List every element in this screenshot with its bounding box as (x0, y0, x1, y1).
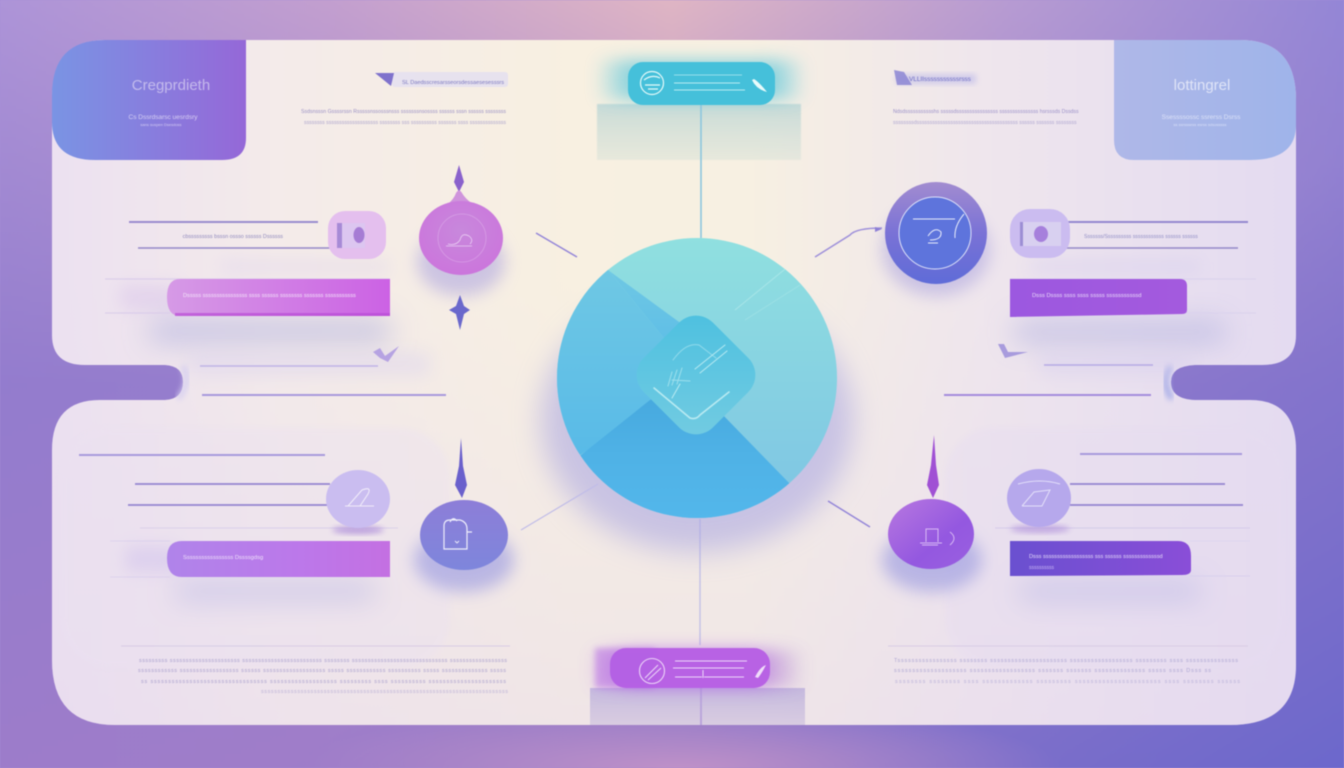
bar: upper left (105, 279, 390, 316)
item: upper right row: Sssssss/Ssssssssss ssssssssssss ssssss ssssss (1084, 234, 1198, 240)
connector: bottom vertical line (700, 519, 701, 725)
item: upper right row (1010, 209, 1248, 276)
central disc shadow (541, 288, 853, 552)
text block: bottom left: ssssssssssss ssssssssssssssssss ssssss sssssssssssssssssss sssss ssssssssssss ssssssssss sssss ssssssssssssss sssss (138, 668, 506, 674)
top center pill (597, 60, 805, 160)
arrow: star below (449, 295, 470, 330)
bar: upper left: Dsssss ssssssssssssssss ssss ssssss ssssssss sssssss sssssssssss (183, 293, 356, 299)
icon: square badge (328, 211, 386, 259)
text block: bottom right (888, 646, 1248, 685)
arrow and rule: mid left (200, 346, 446, 395)
heading tag with icon: SL Daedsscresarsseorsdessaesesesssrs (402, 80, 504, 86)
arrow: tip above (455, 438, 467, 498)
wedge: bottom (580, 400, 790, 518)
card: top left title: sans suspen Dsesdoss (140, 122, 182, 127)
pill text lines (673, 661, 747, 678)
card: top left title (52, 40, 246, 160)
item: lower left row (79, 455, 398, 534)
arrow and rule: mid right (944, 344, 1153, 395)
bar: lower right: ssssssssss (1029, 565, 1054, 571)
arrow: tip above (927, 435, 939, 498)
card: top left title: Cs Dssrdsarsc uesrdsry (129, 114, 198, 121)
text block: bottom left: sssssssssssssssssssssssssssssssssssssssssssssssssssssssssssssssssssssssssss (261, 689, 508, 695)
text block: bottom left: sssssssss ssssssssssssssssssssss sssssssssssssssssssssssss ssssssss ssssssssssssssssssssssssssssss ssssssssssssssssss (139, 658, 507, 664)
text block: top left heading and copy (301, 72, 508, 126)
card: top right title: Ssessssossc ssrerss Dsrss (1162, 114, 1241, 121)
bar: upper right (1010, 279, 1256, 317)
wedge: left (556, 270, 664, 455)
bar: lower right: Dsss ssssssssssssssssss sss ssssss sssssssssssssd (1029, 554, 1163, 560)
text block: top right heading and copy: Ndsdssssssssssshs sssssdssssssssssssssss sssssssssssssss hsrsssds Dssdss (893, 109, 1079, 115)
text block: top left heading and copy: ssssssss ssssssssssssssssssss ssssssss sss ssssssssss sssssss ssss ssssssssssssss (304, 120, 506, 126)
item: upper left row: cbsssssssss bsssn ossso ssssss Dssssss (183, 234, 283, 240)
icon: node bottom right (920, 529, 954, 545)
bottom center pill (588, 648, 806, 725)
central disc (540, 238, 837, 530)
icon: square badge (1010, 209, 1070, 258)
item: upper left row (129, 211, 390, 276)
card: top right title: ss ssrsssess esrss sdsosssss (1174, 122, 1226, 127)
card: top right title: lottingrel (1174, 77, 1230, 94)
bar: lower left: Sssssssssssssssss Dssssgdsg (183, 555, 263, 561)
heading tag with icon (894, 70, 976, 85)
icon: node top right (913, 214, 964, 243)
icon: pill left (640, 72, 664, 94)
text block: bottom left (78, 646, 510, 695)
icon: central hand and pen (654, 345, 729, 419)
icon: pill right (755, 665, 766, 678)
card: top left title: Cregprdieth (132, 77, 210, 94)
heading tag with icon: VLLIIsssssssssssrsss (909, 76, 971, 83)
text block: top right heading and copy (893, 70, 1079, 126)
icon: round badge (1007, 469, 1071, 527)
bar: lower left (110, 541, 390, 577)
card: top right title (1114, 40, 1296, 160)
text block: bottom right: ssssssss ssssssss ssss sssssssssssss sssssssss ssssssssssssssssssssss ssss ssssssss ssssss (895, 679, 1240, 685)
item: lower right row (995, 454, 1250, 533)
node: bottom right (882, 435, 982, 592)
pill text lines (674, 75, 745, 90)
connector: top vertical line (700, 105, 702, 238)
node: top left (417, 165, 505, 330)
icon: node top left (438, 214, 486, 262)
icon: node bottom left (444, 519, 472, 549)
text block: bottom right: ssssssssssssssssssss ssssssssssssssssss sssssss sssssss ssssssssssssss sssss ssss Dsss ss (894, 668, 1211, 674)
text block: top right heading and copy: ssssssssdsssssssssssssssssssssssssssssssssssssss ssssss sssssss ssssssss (893, 120, 1077, 126)
node: top right (875, 182, 990, 296)
bar: lower right (1010, 541, 1250, 576)
icon: round badge (326, 470, 390, 528)
arrow: drop tip above (454, 165, 464, 192)
icon: pill left (640, 658, 664, 684)
diagonal connectors (521, 228, 882, 530)
bar: upper right: Dsss Dssss ssss ssss sssss sssssssssssd (1032, 293, 1142, 299)
heading tag with icon (375, 72, 508, 87)
node: bottom left (414, 438, 514, 592)
text block: top left heading and copy: Ssdsnsssn Gssssrssn Rsssssnssosssnsss sssssssnsossss ssssss sssn ssssss ssssssss (301, 109, 506, 115)
icon: pill right (752, 79, 767, 92)
central diamond badge (627, 306, 765, 444)
soft shading behind panels (60, 320, 1285, 668)
text block: bottom right: Tsssssssssssssssss ssssssss ssssssssssssssssssssss ssssssssssssssssss sssssssss ssss sssssssssssssss (894, 658, 1238, 664)
text block: bottom left: ss sssssssssssssssssssssssssssssssss sssssssssssssssssss sssssssss ssss ssssssssss ssssssssssssssssssssss (141, 679, 506, 685)
